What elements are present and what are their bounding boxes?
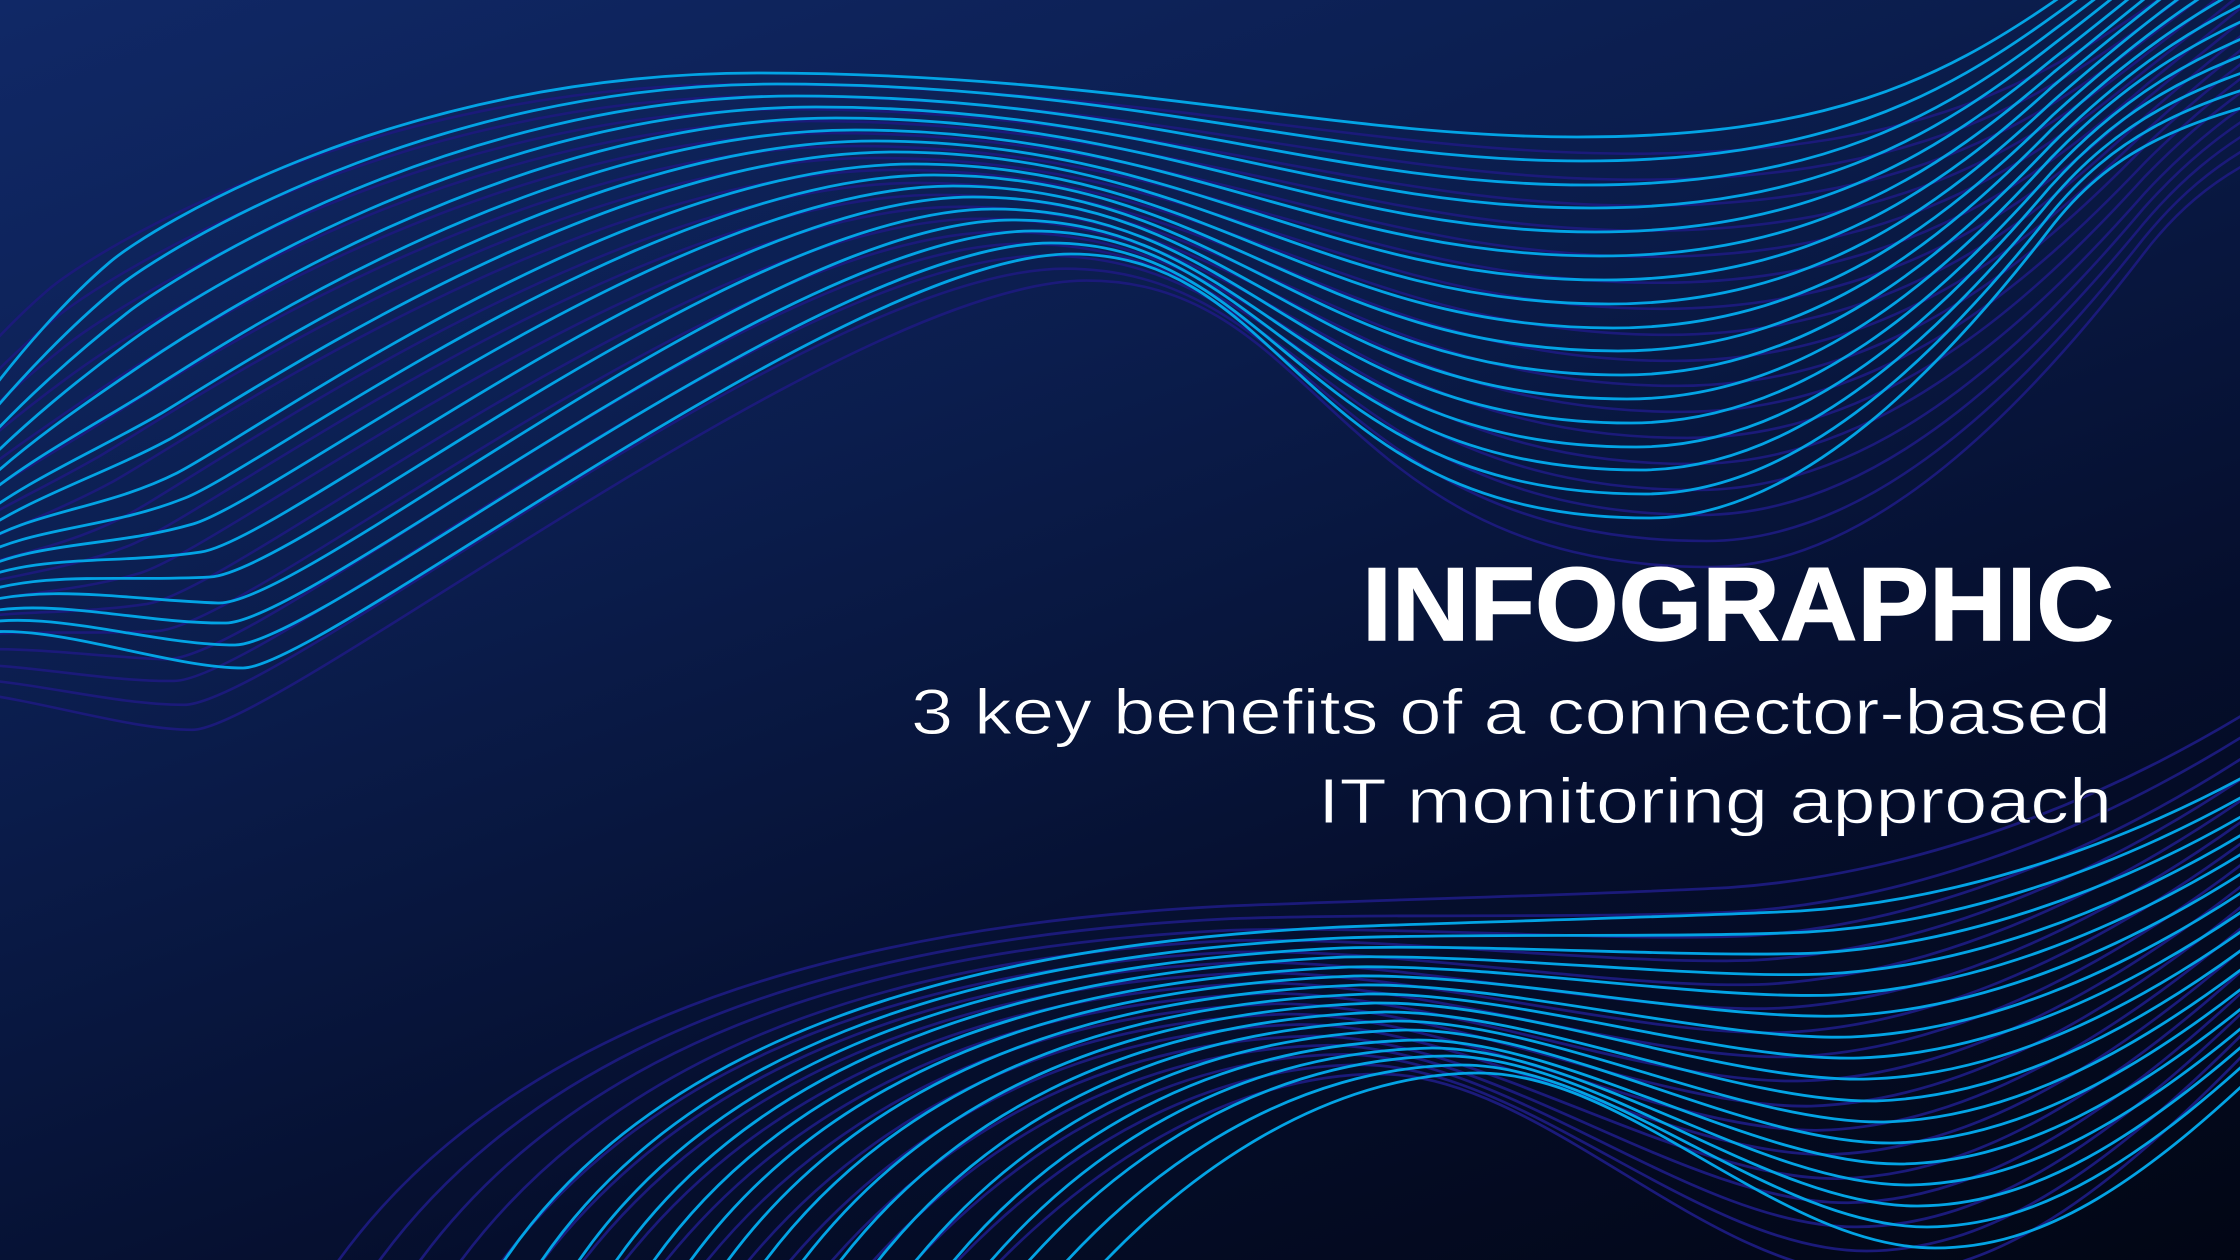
subtitle: IT monitoring approach (1318, 765, 2112, 837)
title: INFOGRAPHIC (1362, 547, 2114, 663)
upper wave: dark echo lines (0, 0, 2240, 730)
upper wave: bright lines (0, 0, 2240, 668)
subtitle (911, 676, 2112, 837)
subtitle: 3 key benefits of a connector-based (911, 676, 2111, 748)
lower wave: bright lines (480, 745, 2240, 1260)
lower wave: dark echo lines (292, 697, 2240, 1260)
